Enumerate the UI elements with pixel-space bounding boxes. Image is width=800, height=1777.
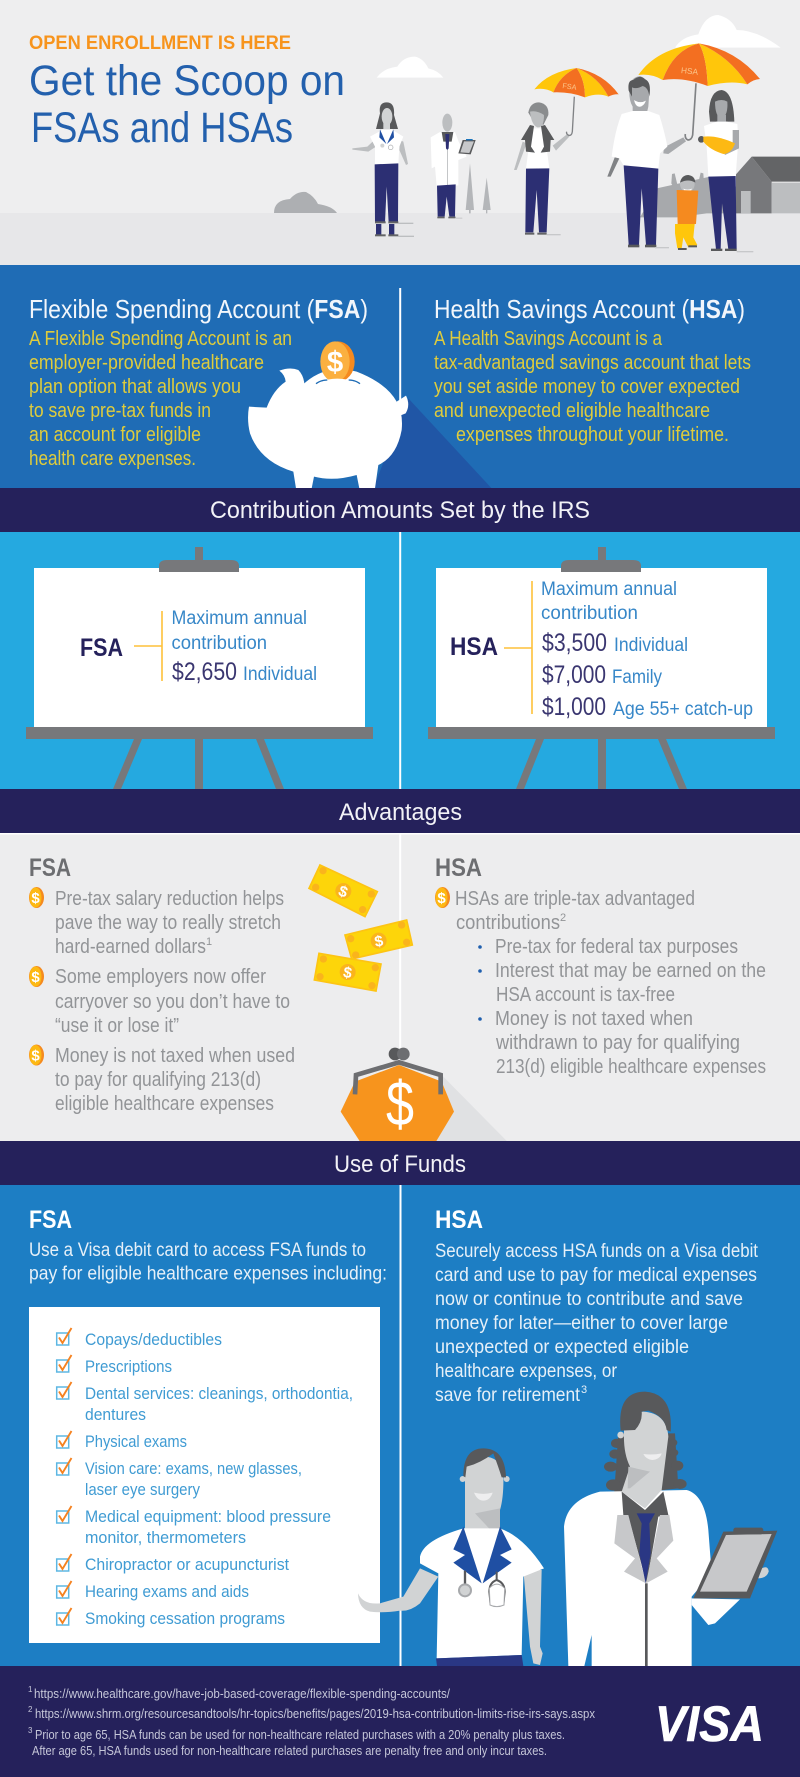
- text: FSA advantages: pave the way to really stretch: [55, 912, 281, 934]
- text: FSA advantages: 1: [206, 936, 212, 948]
- bullet icons: FSA: $: [31, 969, 40, 986]
- text: FSA advantages: Some employers now offer: [55, 966, 266, 988]
- checklist card: [29, 1307, 380, 1643]
- shadow: purse: [433, 1075, 507, 1142]
- text: footnotes: 2: [28, 1705, 33, 1714]
- text: HSA funds: healthcare expenses, or: [435, 1361, 618, 1382]
- text: FSA definition: health care expenses.: [29, 448, 196, 470]
- text: HSA advantages: [455, 888, 766, 1078]
- text: HSA funds: card and use to pay for medical expenses: [435, 1265, 757, 1286]
- text: FSA maximum: Maximum annual: [172, 608, 307, 629]
- heading band: contribution amounts: Contribution Amounts Set by the IRS: [210, 497, 590, 524]
- text: HSA maximums: Family: [612, 667, 662, 688]
- text: HSA maximums: Age 55+ catch-up: [613, 699, 753, 720]
- icon: purse: [341, 1048, 454, 1142]
- icon: bill 2: $: [373, 933, 385, 951]
- text: FSA funds intro: Use a Visa debit card to access FSA funds to: [29, 1240, 366, 1261]
- icon: coin: [320, 341, 355, 382]
- text: FSA definition: an account for eligible: [29, 424, 201, 446]
- label: FSA: FSA: [80, 634, 123, 662]
- text: footnotes: [28, 1685, 595, 1758]
- easel: FSA: [26, 547, 373, 789]
- checklist text: Physical exams: [85, 1433, 187, 1451]
- checklist text: Medical equipment: blood pressure: [85, 1508, 331, 1526]
- text: HSA definition: expenses throughout your lifetime.: [456, 424, 729, 446]
- checklist text: [85, 1331, 353, 1628]
- text: HSA advantages: Money is not taxed when: [495, 1008, 693, 1030]
- panel: contribution amounts: [0, 532, 800, 789]
- text: FSA definition: A Flexible Spending Account is an: [29, 328, 292, 350]
- text: FSA funds intro: [29, 1240, 387, 1284]
- label: HSA: HSA: [450, 633, 498, 661]
- text: footnotes: 3: [28, 1726, 33, 1735]
- title: Get the Scoop on: [29, 57, 345, 105]
- connector: HSA: [504, 581, 532, 714]
- text: FSA advantages: hard-earned dollars: [55, 936, 206, 958]
- cloud: gray: [274, 192, 337, 213]
- text: FSA advantages: Pre-tax salary reduction helps: [55, 888, 284, 910]
- checklist text: laser eye surgery: [85, 1481, 201, 1499]
- text: HSA advantages: contributions: [456, 912, 560, 934]
- logo: Visa: VISA: [655, 1696, 764, 1752]
- text: FSA funds intro: pay for eligible healthcare expenses including:: [29, 1264, 387, 1284]
- text: HSA funds: unexpected or expected eligible: [435, 1337, 689, 1358]
- umbrella: HSA: HSA: [681, 65, 699, 77]
- text: HSA maximums: $3,500: [542, 629, 607, 657]
- text: HSA definition: tax-advantaged savings account that lets: [434, 352, 751, 374]
- icon: bill 3: [314, 953, 381, 991]
- text: HSA funds: save for retirement: [435, 1385, 581, 1406]
- text: HSA advantages: HSAs are triple-tax advantaged: [455, 888, 695, 910]
- text: FSA advantages: carryover so you don’t have to: [55, 991, 290, 1013]
- cloud: white left: [377, 57, 443, 78]
- checklist text: Copays/deductibles: [85, 1331, 222, 1349]
- heading band: use of funds: Use of Funds: [334, 1151, 466, 1178]
- text: FSA advantages: [55, 888, 295, 1115]
- title: FSAs and HSAs: [31, 104, 293, 152]
- text: HSA maximums: Maximum annual: [541, 579, 677, 600]
- person: woman with baby: [698, 90, 753, 252]
- bullet icons: FSA: $: [31, 1048, 40, 1064]
- checklist text: Chiropractor or acupuncturist: [85, 1556, 289, 1574]
- heading: HSA: Health Savings Account (HSA): [434, 294, 745, 324]
- text: HSA advantages: Pre-tax for federal tax purposes: [495, 936, 738, 958]
- icon: bill 1: $: [336, 883, 350, 902]
- text: FSA maximum: Individual: [243, 664, 317, 685]
- text: HSA maximums: [541, 579, 753, 721]
- text: HSA definition: [434, 328, 751, 446]
- text: HSA definition: A Health Savings Account is a: [434, 328, 663, 350]
- text: HSA definition: and unexpected eligible healthcare: [434, 400, 710, 422]
- heading: FSA: Flexible Spending Account (FSA): [29, 294, 368, 324]
- text: HSA funds: 3: [581, 1384, 587, 1396]
- heading band: use of funds: [0, 1141, 800, 1185]
- panel: hero: [0, 0, 800, 265]
- connector: FSA: [134, 611, 162, 681]
- person: child: [671, 173, 704, 250]
- heading band: advantages: Advantages: [339, 799, 462, 826]
- person: nurse: [352, 102, 414, 237]
- person: woman with FSA umbrella: [514, 102, 569, 235]
- checklist text: Smoking cessation programs: [85, 1610, 285, 1628]
- text: FSA advantages: to pay for qualifying 213(d): [55, 1069, 261, 1091]
- bullet icons: FSA: $: [31, 890, 40, 907]
- heading: HSA advantages: HSA: [435, 854, 482, 882]
- umbrella: FSA: [534, 68, 619, 135]
- checklist text: Dental services: cleanings, orthodontia,: [85, 1385, 353, 1403]
- text: HSA funds: now or continue to contribute and save: [435, 1289, 743, 1310]
- icon: coin: $: [327, 346, 343, 379]
- house and hill: [640, 157, 800, 217]
- panel: use of funds: [0, 1185, 800, 1666]
- text: HSA funds: Securely access HSA funds on a Visa debit: [435, 1241, 759, 1262]
- icon: purse: $: [386, 1070, 414, 1140]
- panel: footnotes: [0, 1666, 800, 1777]
- illustration: nurse: [358, 1448, 544, 1666]
- person: man: [607, 76, 686, 248]
- person: doctor with tablet: [431, 114, 476, 219]
- trees: [466, 163, 491, 213]
- checklist text: dentures: [85, 1406, 146, 1424]
- bullet icon: HSA: $: [437, 890, 446, 907]
- text: footnotes: After age 65, HSA funds used for non-healthcare related purchases are penalty free and only incur taxes.: [32, 1743, 547, 1758]
- easel: HSA: [428, 547, 775, 789]
- checkboxes: [57, 1328, 72, 1625]
- panel: account definitions: [0, 265, 800, 488]
- text: footnotes: 1: [28, 1685, 33, 1694]
- text: FSA definition: plan option that allows you: [29, 376, 241, 398]
- bullet dots: [478, 945, 482, 1021]
- heading: FSA advantages: FSA: [29, 854, 71, 882]
- text: footnotes: Prior to age 65, HSA funds can be used for non-healthcare related purchases with a 20% penalty plus taxes.: [35, 1727, 565, 1742]
- checklist text: Vision care: exams, new glasses,: [85, 1460, 302, 1478]
- icon: bill 3: $: [342, 964, 354, 982]
- text: FSA maximum: $2,650: [172, 658, 237, 686]
- icon: bill 1: [309, 865, 377, 917]
- umbrella: FSA: FSA: [562, 81, 577, 92]
- text: FSA advantages: eligible healthcare expenses: [55, 1093, 274, 1115]
- checklist text: Prescriptions: [85, 1358, 172, 1376]
- slot: [316, 379, 360, 390]
- text: footnotes: https://www.shrm.org/resourcesandtools/hr-topics/benefits/pages/2019-hsa-contribution-limits-rise-irs-says.aspx: [35, 1706, 595, 1721]
- text: FSA maximum: [172, 608, 317, 686]
- text: HSA funds: money for later—either to cover large: [435, 1313, 728, 1334]
- heading: FSA funds: FSA: [29, 1206, 72, 1234]
- text: HSA funds: [435, 1241, 759, 1406]
- text: HSA maximums: Individual: [614, 635, 688, 656]
- text: HSA maximums: $7,000: [542, 661, 606, 689]
- heading band: contribution amounts: [0, 488, 800, 532]
- heading band: advantages: [0, 789, 800, 833]
- icon: bill 2: [345, 920, 412, 959]
- icon: dollar bills and purse: [309, 865, 507, 1142]
- text: HSA advantages: 2: [560, 912, 566, 924]
- bullet icon: HSA: [435, 887, 450, 908]
- text: HSA advantages: withdrawn to pay for qualifying: [495, 1032, 740, 1054]
- illustration: people with umbrellas: [352, 15, 800, 252]
- checklist text: Hearing exams and aids: [85, 1583, 249, 1601]
- checklist text: monitor, thermometers: [85, 1529, 246, 1547]
- text: FSA definition: [29, 328, 292, 470]
- illustration: doctor with clipboard: [564, 1392, 777, 1666]
- text: HSA maximums: $1,000: [542, 693, 606, 721]
- bullet icons: FSA: [29, 887, 44, 1066]
- title: [29, 57, 345, 152]
- cloud: white right: [675, 15, 781, 48]
- umbrella: HSA: [638, 43, 760, 140]
- heading: HSA funds: HSA: [435, 1206, 483, 1234]
- text: HSA advantages: HSA account is tax-free: [496, 984, 675, 1006]
- text: FSA maximum: contribution: [172, 633, 267, 654]
- icon: piggy bank: [248, 341, 492, 488]
- text: HSA maximums: contribution: [541, 603, 638, 624]
- eyebrow: OPEN ENROLLMENT IS HERE: [29, 33, 291, 54]
- text: HSA advantages: Interest that may be earned on the: [495, 960, 766, 982]
- text: FSA advantages: “use it or lose it”: [55, 1015, 179, 1037]
- text: footnotes: https://www.healthcare.gov/have-job-based-coverage/flexible-spending-accounts/: [34, 1686, 450, 1701]
- text: FSA advantages: Money is not taxed when used: [55, 1045, 295, 1067]
- text: FSA definition: to save pre-tax funds in: [29, 400, 211, 422]
- panel: advantages: [0, 833, 800, 1142]
- text: HSA definition: you set aside money to cover expected: [434, 376, 740, 398]
- text: FSA definition: employer-provided healthcare: [29, 352, 264, 374]
